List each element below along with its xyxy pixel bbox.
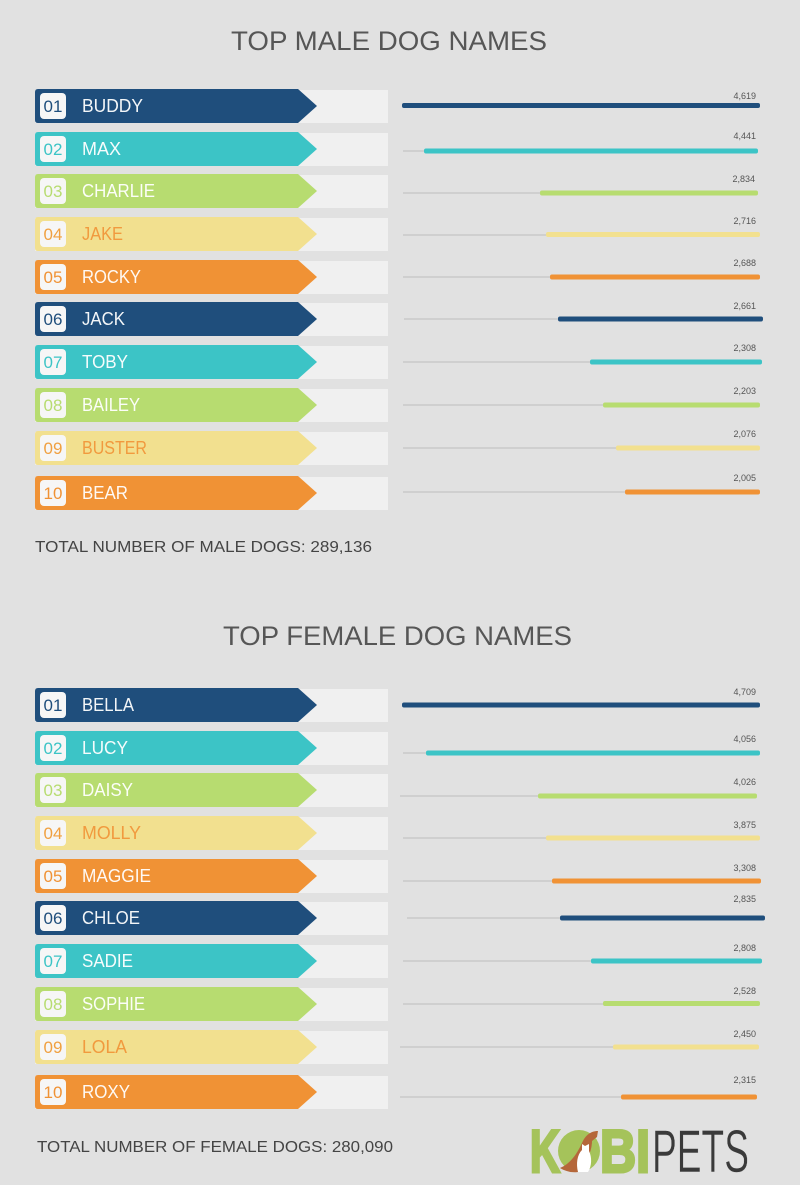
- row: 09 Buster: [35, 431, 388, 465]
- row: 10 Roxy: 10: [44, 1083, 62, 1102]
- row: 07 Toby: TOBY: [82, 352, 128, 372]
- row: 04 Jake: [35, 217, 388, 251]
- bar: Buddy 4,619: [402, 91, 760, 108]
- row: 02 Lucy: [35, 731, 388, 765]
- row: 04 Jake: 04: [44, 225, 62, 244]
- row: 02 Max: 02: [44, 140, 62, 159]
- logo wordmark: Bi: BI: [600, 1118, 650, 1185]
- row: 02 Lucy: 02: [44, 739, 62, 758]
- bar: Rocky 2,688: 2,688: [733, 258, 756, 268]
- bar: Max 4,441: [403, 131, 758, 154]
- bar: Sophie 2,528: 2,528: [733, 986, 756, 996]
- bar: Bailey 2,203: [403, 386, 760, 408]
- logo: Kobi Pets: [530, 1118, 749, 1185]
- bar: Jack 2,661: [404, 301, 763, 322]
- bar: Toby 2,308: [403, 343, 762, 364]
- bar: Roxy 2,315: 2,315: [733, 1075, 756, 1085]
- row: 08 Sophie: 08: [44, 995, 62, 1014]
- row: 06 Jack: [35, 302, 388, 336]
- text: total male dogs: TOTAL NUMBER OF MALE DOGS: 289,136: [35, 539, 372, 556]
- row: 07 Sadie: SADIE: [82, 951, 133, 971]
- row: 04 Molly: MOLLY: [82, 823, 141, 843]
- row: 03 Charlie: 03: [44, 182, 62, 201]
- row: 07 Toby: 07: [44, 353, 62, 372]
- bar: Bear 2,005: [403, 473, 760, 494]
- row: 05 Rocky: ROCKY: [82, 267, 141, 287]
- bar: Max 4,441: 4,441: [733, 131, 756, 141]
- bar: Jack 2,661: 2,661: [733, 301, 756, 311]
- bar: Lola 2,450: 2,450: [733, 1029, 756, 1039]
- logo wordmark: Kobi: K: [530, 1118, 560, 1185]
- row: 06 Jack: 06: [44, 310, 62, 329]
- row: 10 Bear: [35, 476, 388, 510]
- row: 01 Buddy: [35, 89, 388, 123]
- row: 04 Molly: [35, 816, 388, 850]
- title: top male dog names: TOP MALE DOG NAMES: [231, 26, 547, 56]
- row: 10 Roxy: ROXY: [82, 1082, 130, 1102]
- row: 06 Chloe: CHLOE: [82, 908, 140, 928]
- bar: Chloe 2,835: 2,835: [733, 894, 756, 904]
- row: 02 Lucy: LUCY: [82, 738, 128, 758]
- row: 06 Jack: JACK: [82, 309, 125, 329]
- row: 06 Chloe: 06: [44, 909, 62, 928]
- bar: Lucy 4,056: [403, 734, 760, 756]
- row: 02 Max: MAX: [82, 139, 121, 159]
- bar: Maggie 3,308: [403, 863, 761, 884]
- row: 05 Maggie: MAGGIE: [82, 866, 151, 886]
- row: 09 Buster: 09: [44, 439, 62, 458]
- bar: Buster 2,076: [403, 429, 760, 450]
- row: 04 Molly: 04: [44, 824, 62, 843]
- bar: Charlie 2,834: 2,834: [732, 174, 755, 184]
- bar: Roxy 2,315: [400, 1075, 757, 1100]
- bar: Toby 2,308: 2,308: [733, 343, 756, 353]
- bar: Bear 2,005: 2,005: [733, 473, 756, 483]
- row: 04 Jake: JAKE: [82, 224, 123, 244]
- logo icon: dog and cat in circle: [558, 1130, 600, 1172]
- bar: Maggie 3,308: 3,308: [733, 863, 756, 873]
- row: 01 Bella: BELLA: [82, 695, 134, 715]
- title: top female dog names: TOP FEMALE DOG NAMES: [223, 621, 572, 651]
- bar: Bailey 2,203: 2,203: [733, 386, 756, 396]
- bar: Bella 4,709: [402, 687, 760, 708]
- bar: Chloe 2,835: [407, 894, 765, 920]
- row: 09 Lola: LOLA: [82, 1037, 127, 1057]
- chart: male name counts: [402, 91, 763, 494]
- row: 09 Lola: [35, 1030, 388, 1064]
- panel: female name ranking: [35, 688, 388, 1109]
- row: 01 Buddy: 01: [44, 97, 62, 116]
- bar: Charlie 2,834: [403, 174, 758, 196]
- row: 03 Charlie: [35, 174, 388, 208]
- row: 01 Bella: 01: [44, 696, 62, 715]
- row: 03 Daisy: DAISY: [82, 780, 133, 800]
- panel: male name ranking: [35, 89, 388, 510]
- chart: female name counts: [400, 687, 765, 1100]
- bar: Molly 3,875: [403, 820, 760, 840]
- row: 06 Chloe: [35, 901, 388, 935]
- row: 08 Bailey: BAILEY: [82, 395, 140, 415]
- row: 05 Rocky: [35, 260, 388, 294]
- row: 02 Max: [35, 132, 388, 166]
- bar: Daisy 4,026: [400, 777, 757, 798]
- bar: Jake 2,716: [403, 216, 760, 237]
- bar: Molly 3,875: 3,875: [733, 820, 756, 830]
- row: 09 Lola: 09: [44, 1038, 62, 1057]
- row: 03 Daisy: [35, 773, 388, 807]
- bar: Sadie 2,808: [403, 943, 762, 964]
- bar: Lola 2,450: [400, 1029, 759, 1050]
- row: 07 Sadie: 07: [44, 952, 62, 971]
- row: 07 Sadie: [35, 944, 388, 978]
- row: 03 Daisy: 03: [44, 781, 62, 800]
- bar: Lucy 4,056: 4,056: [733, 734, 756, 744]
- row: 05 Rocky: 05: [44, 268, 62, 287]
- bar: Sophie 2,528: [403, 986, 760, 1006]
- bar: Buddy 4,619: 4,619: [733, 91, 756, 101]
- row: 08 Bailey: 08: [44, 396, 62, 415]
- row: 08 Sophie: [35, 987, 388, 1021]
- bar: Jake 2,716: 2,716: [733, 216, 756, 226]
- row: 10 Roxy: [35, 1075, 388, 1109]
- bar: Daisy 4,026: 4,026: [733, 777, 756, 787]
- row: 08 Bailey: [35, 388, 388, 422]
- row: 01 Buddy: BUDDY: [82, 96, 143, 116]
- bar: Sadie 2,808: 2,808: [733, 943, 756, 953]
- row: 05 Maggie: [35, 859, 388, 893]
- row: 09 Buster: BUSTER: [82, 438, 147, 458]
- bar: Bella 4,709: 4,709: [733, 687, 756, 697]
- bar: Rocky 2,688: [403, 258, 760, 280]
- row: 05 Maggie: 05: [44, 867, 62, 886]
- row: 10 Bear: BEAR: [82, 483, 128, 503]
- row: 07 Toby: [35, 345, 388, 379]
- text: total female dogs: TOTAL NUMBER OF FEMALE DOGS: 280,090: [37, 1139, 393, 1156]
- row: 10 Bear: 10: [44, 484, 62, 503]
- bar: Buster 2,076: 2,076: [733, 429, 756, 439]
- row: 08 Sophie: SOPHIE: [82, 994, 145, 1014]
- row: 03 Charlie: CHARLIE: [82, 181, 155, 201]
- row: 01 Bella: [35, 688, 388, 722]
